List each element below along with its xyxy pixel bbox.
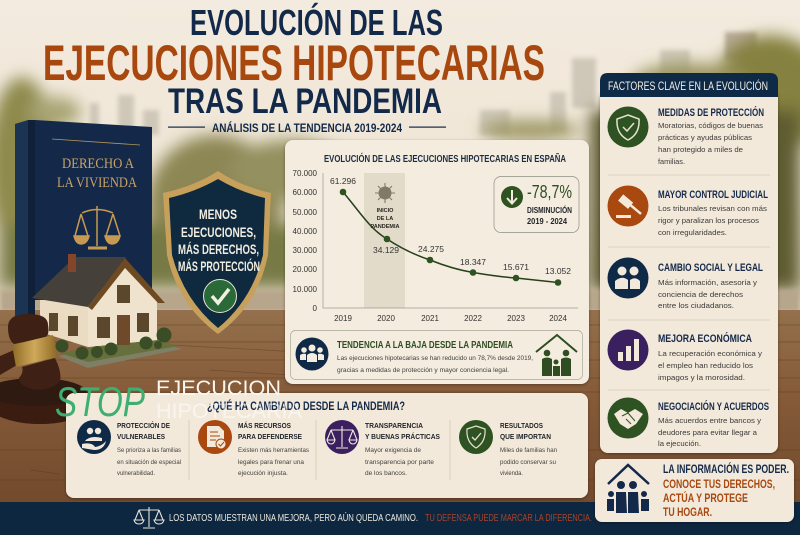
x axis: 2019 bbox=[334, 314, 352, 323]
change: results: vivienda. bbox=[500, 470, 523, 477]
callout: decrease bbox=[494, 176, 579, 232]
callout: decrease: -78,7% bbox=[527, 182, 572, 202]
change: transparency: de los bancos. bbox=[365, 470, 407, 477]
illustration: law book: LA VIVIENDA bbox=[57, 175, 137, 191]
illustration: shield bbox=[163, 171, 271, 334]
what changed heading: ¿QUÉ HA CAMBIADO DESDE LA PANDEMIA? bbox=[207, 400, 405, 413]
subtitle: ANÁLISIS DE LA TENDENCIA 2019-2024 bbox=[212, 120, 402, 135]
factor: social and legal change: CAMBIO SOCIAL Y LEGAL bbox=[658, 262, 763, 274]
change: results: RESULTADOS bbox=[500, 421, 543, 430]
change: transparency: TRANSPARENCIA bbox=[365, 421, 423, 430]
icon: scales bbox=[134, 507, 164, 528]
change: vulnerable protection: PROTECCIÓN DE bbox=[117, 421, 170, 430]
pandemic band: DE LA bbox=[377, 216, 393, 222]
footer highlight: TU DEFENSA PUEDE MARCAR LA DIFERENCIA. bbox=[425, 512, 592, 524]
icon: house and family bbox=[607, 465, 649, 513]
callout: information is power bbox=[595, 459, 794, 522]
factor: economic improvement: impagos y la morosidad. bbox=[658, 373, 745, 382]
factor: judicial control: Los tribunales revisan con más bbox=[658, 204, 767, 213]
y axis: 10.000 bbox=[293, 285, 318, 294]
illustration: law book bbox=[15, 120, 152, 319]
x axis: 2023 bbox=[507, 314, 525, 323]
y axis: 0 bbox=[313, 304, 318, 313]
factor: protection measures: prácticas y ayudas públicas bbox=[658, 133, 752, 142]
change: more resources: Existen más herramientas bbox=[238, 447, 309, 454]
factor: social and legal change: entre los ciudadanos. bbox=[658, 301, 734, 310]
footer message: LOS DATOS MUESTRAN UNA MEJORA, PERO AÚN QUEDA CAMINO. bbox=[169, 511, 418, 524]
change: more resources: ejecución injusta. bbox=[238, 470, 288, 477]
callout: information is power: TU HOGAR. bbox=[663, 507, 712, 519]
illustration: shield: MÁS DERECHOS, bbox=[178, 241, 259, 257]
watermark: stop ejecucion hipotecaria bbox=[55, 377, 302, 425]
illustration: shield: MÁS PROTECCIÓN bbox=[178, 257, 260, 274]
change: transparency: Y BUENAS PRÁCTICAS bbox=[365, 432, 440, 441]
change: more resources bbox=[198, 420, 309, 477]
panel: line chart bbox=[285, 140, 589, 384]
x axis: 2020 bbox=[377, 314, 395, 323]
illustration: model house bbox=[32, 254, 182, 368]
change: vulnerable protection bbox=[77, 420, 181, 477]
factor: protection measures bbox=[608, 106, 764, 166]
factor: negotiation and agreements: la ejecución. bbox=[658, 439, 701, 448]
x axis: 2021 bbox=[421, 314, 439, 323]
data labels bbox=[330, 176, 571, 276]
trend box: Las ejecuciones hipotecarias se han reducido un 78,7% desde 2019, bbox=[337, 355, 533, 362]
title: TRAS LA PANDEMIA bbox=[168, 82, 442, 121]
title bbox=[43, 1, 545, 121]
illustration: gavel bbox=[0, 314, 94, 424]
panel: key factors bbox=[600, 73, 778, 453]
callout: decrease: 2019 - 2024 bbox=[527, 216, 567, 226]
panel: what changed bbox=[66, 393, 588, 498]
change: transparency bbox=[325, 420, 440, 477]
trend box: gracias a medidas de protección y mayor conciencia legal. bbox=[337, 367, 509, 374]
data labels: 13.052 bbox=[545, 266, 571, 276]
change: vulnerable protection: vulnerabilidad. bbox=[117, 470, 155, 477]
watermark: stop ejecucion hipotecaria: HIPOTECARIA bbox=[156, 400, 302, 423]
factor: judicial control: rigor y paralizan los procesos bbox=[658, 216, 759, 225]
factor: economic improvement: el empleo han reducido los bbox=[658, 361, 753, 370]
change: vulnerable protection: en situación de especial bbox=[117, 459, 181, 466]
trend box bbox=[290, 330, 582, 380]
callout: decrease: DISMINUCIÓN bbox=[527, 204, 572, 215]
y axis: 20.000 bbox=[293, 265, 318, 274]
change: more resources: legales para frenar una bbox=[238, 459, 304, 466]
data labels: 34.129 bbox=[373, 245, 399, 255]
data labels: 18.347 bbox=[460, 257, 486, 267]
callout: information is power: ACTÚA Y PROTEGE bbox=[663, 492, 748, 505]
factor: protection measures: familias. bbox=[658, 157, 685, 166]
change: vulnerable protection: Se prioriza a las familias bbox=[117, 447, 181, 454]
y axis: 50.000 bbox=[293, 208, 318, 217]
title: EJECUCIONES HIPOTECARIAS bbox=[43, 35, 545, 91]
pandemic band: PANDEMIA bbox=[371, 224, 399, 230]
y axis: 60.000 bbox=[293, 188, 318, 197]
factor: social and legal change: conciencia de derechos bbox=[658, 290, 743, 299]
data labels: 24.275 bbox=[418, 244, 444, 254]
change: results bbox=[459, 420, 557, 477]
factor: judicial control: con irregularidades. bbox=[658, 228, 727, 237]
factor: economic improvement bbox=[608, 330, 762, 382]
illustration: law book: DERECHO A bbox=[62, 156, 134, 172]
change: results: Miles de familias han bbox=[500, 447, 557, 454]
footer band bbox=[0, 502, 800, 535]
watermark: stop ejecucion hipotecaria: STOP bbox=[55, 378, 145, 425]
change: transparency: Mayor exigencia de bbox=[365, 447, 421, 454]
factor: social and legal change: Más información, asesoría y bbox=[658, 278, 757, 287]
pandemic band: INICIO bbox=[377, 208, 394, 214]
x axis bbox=[334, 314, 567, 323]
factor: economic improvement: MEJORA ECONÓMICA bbox=[658, 332, 752, 345]
factor: protection measures: MEDIDAS DE PROTECCIÓN bbox=[658, 106, 764, 119]
trend box: TENDENCIA A LA BAJA DESDE LA PANDEMIA bbox=[337, 339, 513, 351]
change: results: QUE IMPORTAN bbox=[500, 432, 551, 441]
factor: negotiation and agreements bbox=[608, 398, 769, 448]
factor: negotiation and agreements: deudores para evitar llegar a bbox=[658, 428, 757, 437]
x axis: 2022 bbox=[464, 314, 482, 323]
data labels: 15.671 bbox=[503, 262, 529, 272]
factor: negotiation and agreements: Más acuerdos entre bancos y bbox=[658, 416, 761, 425]
watermark: stop ejecucion hipotecaria: EJECUCION bbox=[156, 377, 281, 400]
y axis: 30.000 bbox=[293, 246, 318, 255]
illustration: shield: MENOS bbox=[199, 206, 237, 222]
y axis: 70.000 bbox=[293, 169, 318, 178]
factor: protection measures: han protegido a miles de bbox=[658, 145, 743, 154]
change: transparency: transparencia por parte bbox=[365, 459, 434, 466]
chart title: EVOLUCIÓN DE LAS EJECUCIONES HIPOTECARIAS EN ESPAÑA bbox=[324, 152, 566, 165]
factor: economic improvement: La recuperación económica y bbox=[658, 349, 762, 358]
change: more resources: PARA DEFENDERSE bbox=[238, 432, 302, 441]
pandemic band bbox=[364, 173, 405, 308]
y axis bbox=[293, 169, 578, 313]
factor: protection measures: Moratorias, códigos de buenas bbox=[658, 121, 763, 130]
title: EVOLUCIÓN DE LAS bbox=[190, 1, 443, 43]
illustration: shield: EJECUCIONES, bbox=[181, 224, 256, 240]
change: more resources: MÁS RECURSOS bbox=[238, 421, 291, 430]
key factors header bbox=[600, 73, 778, 97]
data line bbox=[340, 189, 561, 286]
change: vulnerable protection: VULNERABLES bbox=[117, 432, 165, 441]
data labels: 61.296 bbox=[330, 176, 356, 186]
change: results: podido conservar su bbox=[500, 459, 556, 466]
factor: social and legal change bbox=[608, 258, 763, 310]
x axis: 2024 bbox=[549, 314, 567, 323]
y axis: 40.000 bbox=[293, 227, 318, 236]
factor: judicial control bbox=[608, 186, 768, 237]
